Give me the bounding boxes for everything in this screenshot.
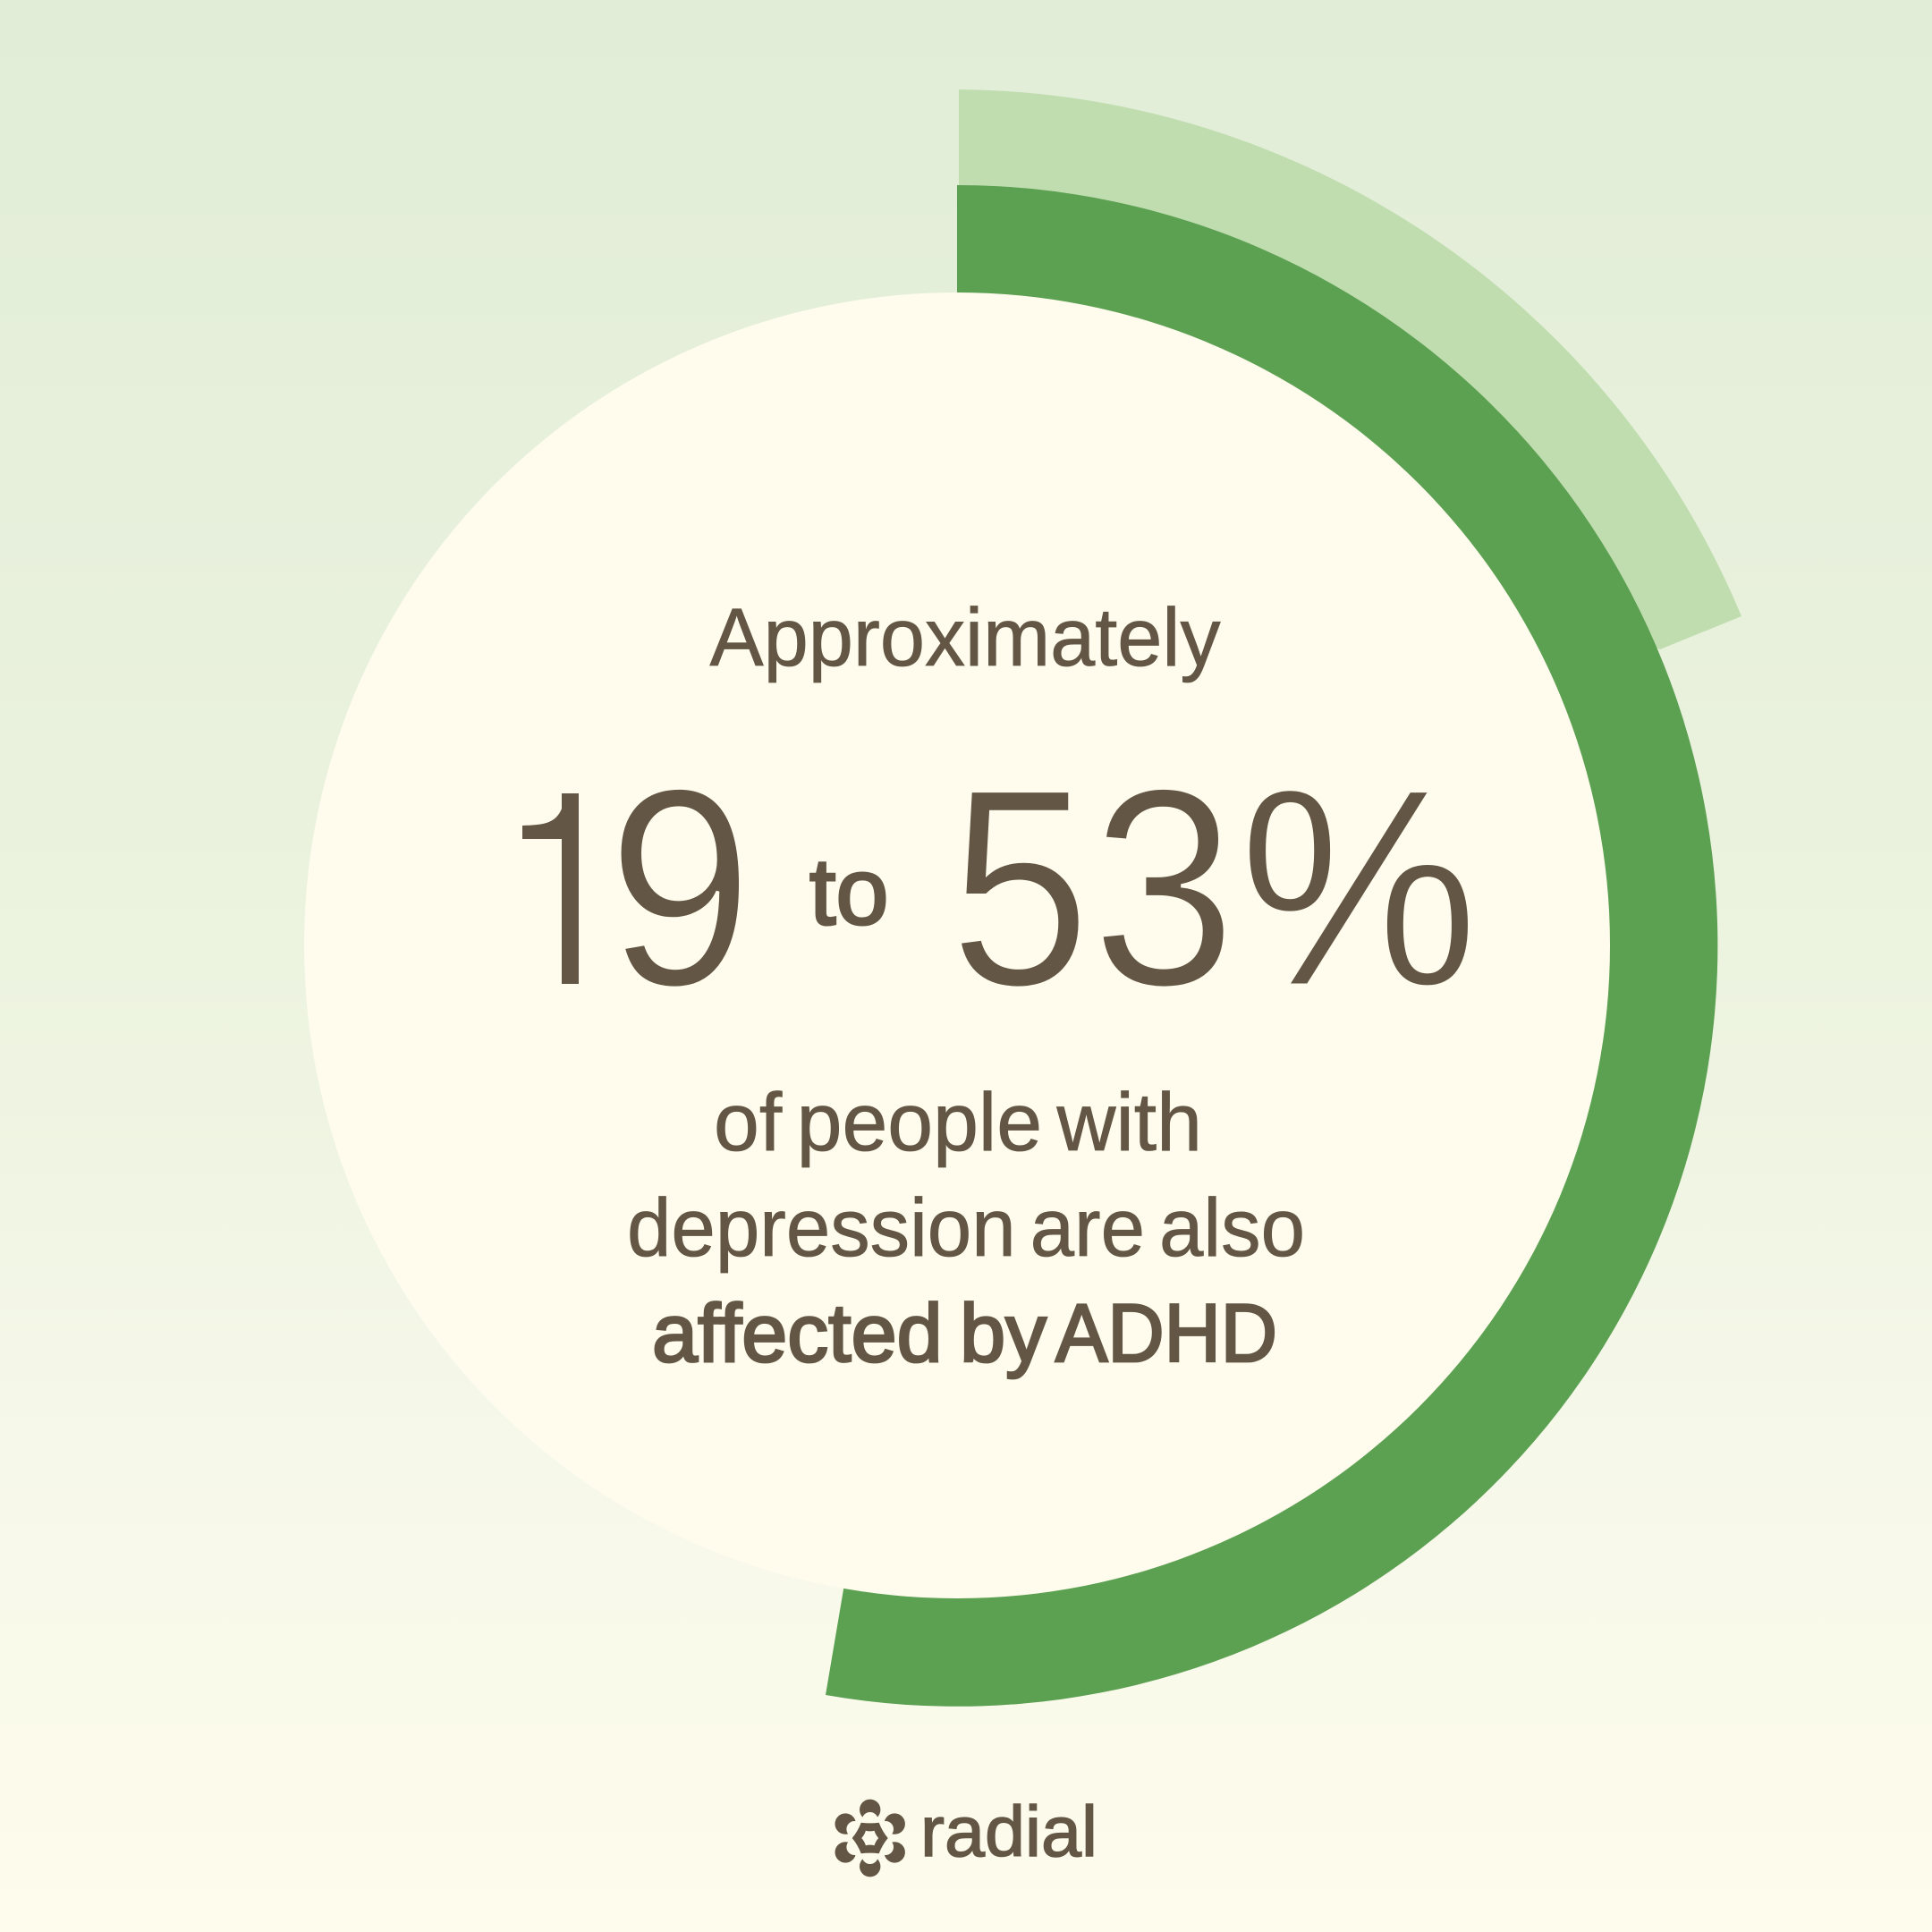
cream center circle <box>304 292 1610 1598</box>
text: affected by ADHD <box>652 1288 1277 1379</box>
wordmark: radial: radial <box>920 1792 1097 1871</box>
number: 19: 1 <box>506 728 625 1045</box>
number: 53%: 5 <box>950 729 1090 1046</box>
text: affected by ADHD: affected by <box>652 1288 1046 1379</box>
text: of people with depression are also <box>627 1077 1305 1274</box>
number: 19: 9 <box>607 729 753 1046</box>
logo: radial <box>835 1792 1097 1877</box>
text: of people with depression are also: of people with <box>714 1077 1202 1168</box>
dark green progress arc <box>826 185 1717 1707</box>
light green outer arc <box>959 89 1741 649</box>
number: 53%: 3 <box>1091 730 1236 1046</box>
icon: radial flower mark <box>835 1800 905 1877</box>
text: of people with depression are also: depression are also <box>627 1182 1305 1274</box>
word: to: to <box>809 839 888 945</box>
text: approximately: Approximately <box>710 592 1220 683</box>
number: 53% <box>950 729 1479 1046</box>
number: 19 <box>522 789 739 987</box>
text: affected by ADHD: ADHD <box>1055 1288 1277 1379</box>
number: 53%: % <box>1238 730 1479 1046</box>
statistic: 19 to 53% <box>522 789 1468 987</box>
